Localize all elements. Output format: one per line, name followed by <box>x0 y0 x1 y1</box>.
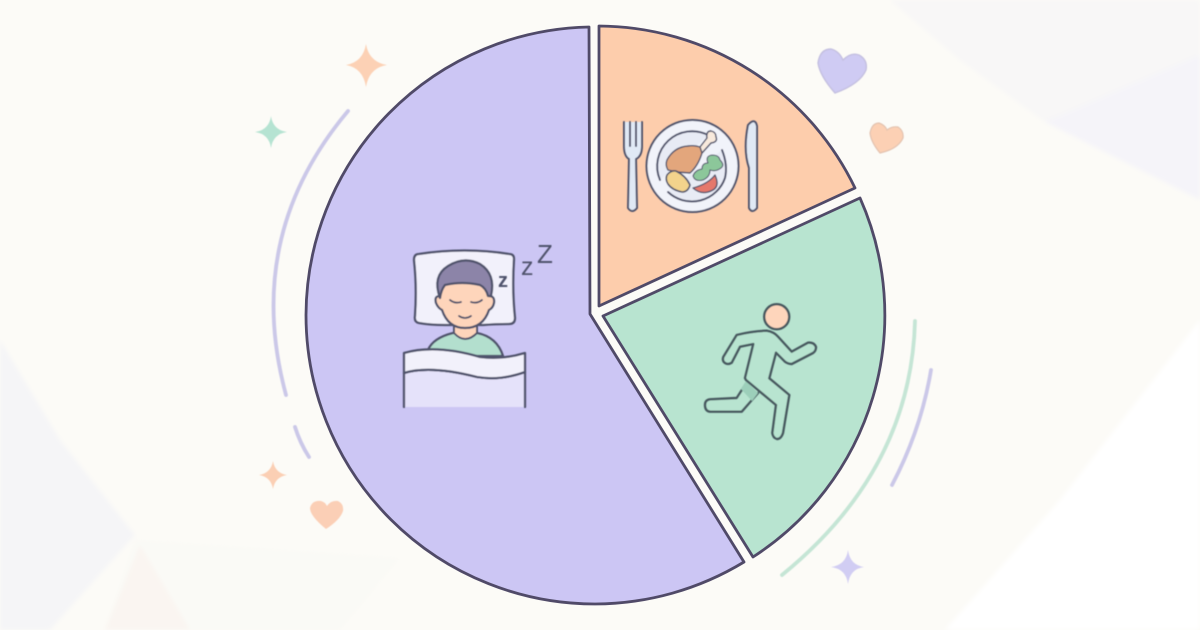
arc: left lavender long <box>274 111 348 395</box>
sparkle: lavender bottom <box>831 550 864 584</box>
knife <box>746 121 757 211</box>
decorations: sparkles and hearts <box>255 44 903 584</box>
shirt <box>428 333 503 356</box>
snore letters zzz <box>498 239 553 292</box>
pie chart <box>306 26 885 604</box>
icon: plate with fork and knife <box>624 120 757 212</box>
heart: orange right <box>870 123 903 153</box>
sparkle: orange top <box>346 44 387 87</box>
snore letters zzz: z <box>521 253 534 281</box>
neck <box>454 322 477 339</box>
blanket lower <box>404 370 525 407</box>
fork <box>624 122 642 211</box>
closed eyes and smile <box>450 300 482 318</box>
sparkle: orange bottom <box>259 461 287 489</box>
slice: food (orange) <box>599 26 855 306</box>
back leg <box>705 382 758 412</box>
bone end <box>700 131 716 153</box>
snore letters zzz: z <box>498 270 508 292</box>
chicken leg <box>666 131 716 173</box>
body and front leg <box>723 331 816 439</box>
head <box>764 304 789 329</box>
tomato wedge <box>693 175 717 193</box>
potato <box>666 171 690 192</box>
slice: exercise (green) <box>603 198 885 557</box>
head <box>436 280 494 328</box>
pillow <box>414 250 515 325</box>
slice: sleep (purple) <box>306 27 744 604</box>
arc: left lavender short <box>295 427 309 457</box>
heart: orange bottom <box>310 501 343 529</box>
icon: running figure <box>705 304 816 439</box>
arc: right green <box>782 321 915 575</box>
snore letters zzz: Z <box>537 239 553 269</box>
plate <box>646 120 738 212</box>
sparkle: green <box>255 116 287 148</box>
back leg shadow <box>741 381 758 401</box>
hair <box>437 260 492 298</box>
plate inner ring <box>657 131 726 201</box>
blanket fold <box>404 349 525 378</box>
heart: lavender <box>818 49 866 93</box>
decorations: outer arcs <box>274 111 931 575</box>
arc: right lavender <box>892 370 931 485</box>
icon: sleeping person <box>404 250 525 407</box>
broccoli <box>693 155 723 180</box>
